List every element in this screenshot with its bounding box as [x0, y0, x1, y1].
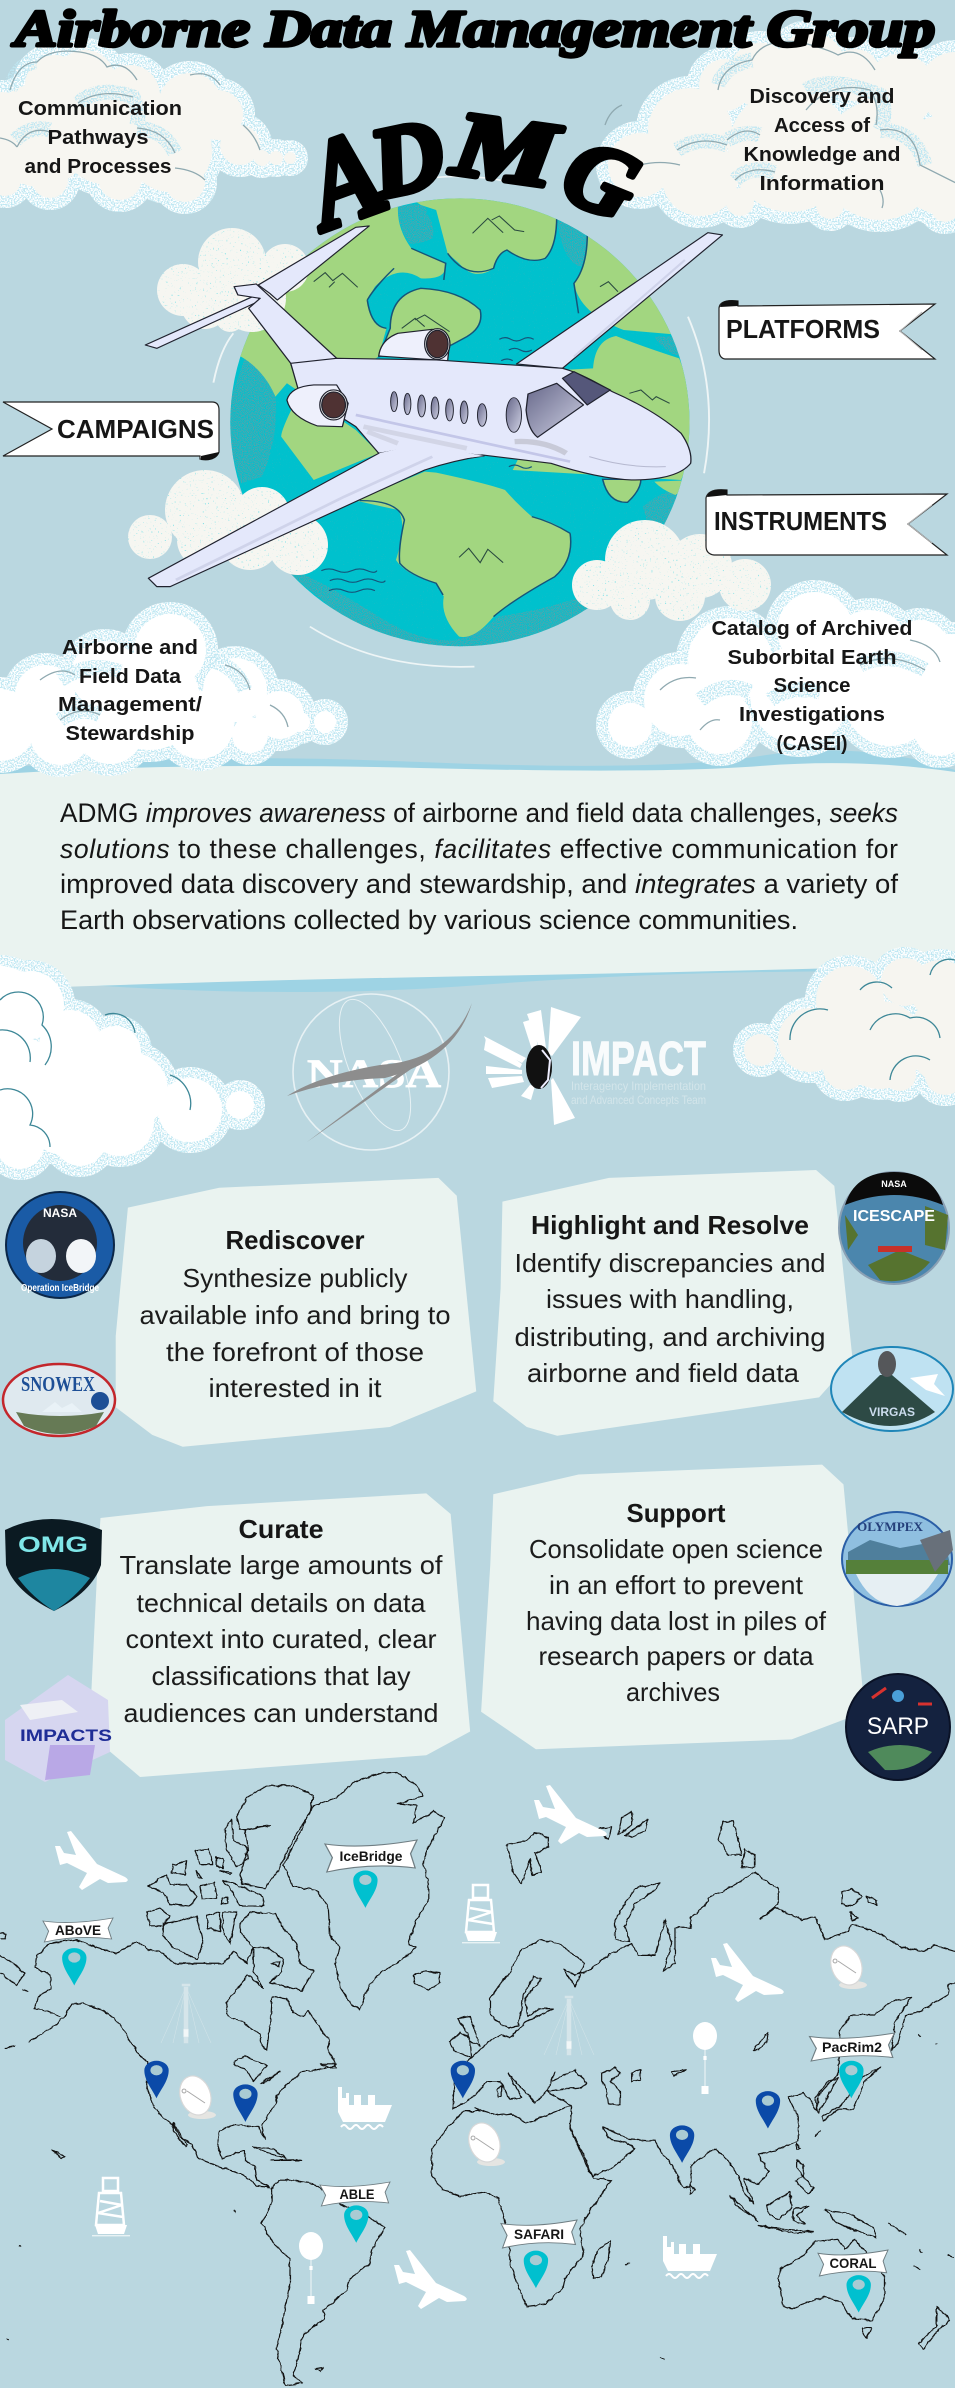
label: CORAL: CORAL: [830, 2255, 877, 2271]
cloud text: Management/: [58, 694, 202, 716]
small clouds: [128, 228, 771, 621]
panel: rediscover: the forefront of those: [166, 1337, 424, 1367]
panel: rediscover: [116, 1178, 476, 1447]
map icon: ships: [338, 2087, 717, 2278]
badge: OMG: [5, 1519, 102, 1611]
logo: NASA: NASA: [307, 1051, 441, 1096]
cloud text: Airborne and: [62, 637, 198, 659]
cloud: CASEI: [608, 592, 955, 756]
ribbon: instruments: [706, 490, 947, 555]
ribbon: platforms: PLATFORMS: [726, 316, 880, 344]
badge: Operation IceBridge: [6, 1192, 114, 1298]
panel: curate: context into curated, clear: [126, 1624, 437, 1654]
cloud text: [18, 98, 182, 178]
map: americas and arctic: [0, 1772, 480, 2385]
logo: ADMG lettering: M: [445, 91, 567, 208]
cloud text: Catalog of Archived: [712, 618, 912, 640]
cloud text: [712, 618, 912, 755]
label: CORAL: [818, 2250, 888, 2276]
world map: [0, 1772, 955, 2385]
badge: SnowEx: [3, 1364, 115, 1436]
logo: ADMG lettering: [281, 91, 653, 259]
label: IceBridge: [325, 1840, 417, 1872]
label: IceBridge: IceBridge: [340, 1848, 403, 1864]
logo: ADMG lettering: A: [281, 102, 402, 259]
panel: curate: technical details on data: [136, 1588, 426, 1618]
label: PacRim2: [810, 2033, 894, 2061]
cloud: discovery: [605, 32, 955, 222]
cloud: stewardship: [0, 614, 336, 765]
badge: IMPACTS: IMPACTS: [20, 1726, 112, 1745]
map icon: satellite dishes: [174, 1942, 867, 2166]
plane: [145, 226, 722, 587]
badge: SARP: [846, 1674, 950, 1780]
ribbon: instruments: INSTRUMENTS: [714, 508, 887, 536]
badge: OLYMPEX: [842, 1512, 953, 1606]
panel: curate: Translate large amounts of: [120, 1550, 443, 1580]
badge: ICESCAPE: ICESCAPE: [853, 1208, 935, 1225]
panel: curate: classifications that lay: [152, 1661, 410, 1691]
cloud: lower left: [0, 966, 254, 1169]
ribbon: campaigns: [3, 402, 219, 460]
logo: IMPACT: Interagency Implementation: [571, 1079, 706, 1093]
cloud text: Knowledge and: [744, 144, 900, 166]
panel: curate: audiences can understand: [124, 1698, 439, 1728]
hero: globe and plane: [128, 176, 771, 667]
panel: rediscover: available info and bring to: [140, 1300, 450, 1330]
badge: VIRGAS: VIRGAS: [869, 1405, 915, 1419]
mission text: solutions to these challenges, facilitates effective communication for: [60, 834, 898, 864]
map icon: balloons: [299, 2022, 717, 2304]
panel: rediscover: interested in it: [208, 1373, 382, 1403]
globe: [230, 198, 690, 646]
cloud text: (CASEI): [776, 733, 848, 755]
panel: rediscover: Rediscover: [226, 1225, 364, 1255]
badge: Operation IceBridge: NASA: [43, 1206, 77, 1220]
logo: ADMG lettering: G: [549, 116, 653, 241]
logo: IMPACT: IMPACT: [571, 1033, 706, 1086]
cloud: communication: [0, 50, 296, 202]
badge: OLYMPEX: OLYMPEX: [857, 1519, 924, 1534]
cloud text: Investigations: [739, 704, 885, 726]
panel: support: Consolidate open science: [529, 1534, 823, 1564]
panel: curate: Curate: [238, 1514, 324, 1544]
badge: ICESCAPE: [839, 1172, 949, 1284]
badge: IMPACTS: [5, 1675, 112, 1782]
badge: SARP: SARP: [867, 1713, 929, 1740]
map icon: airplanes: [55, 1785, 784, 2309]
cloud text: Science: [774, 675, 850, 697]
map: eurasia, africa, oceania: [432, 1811, 955, 2360]
panel: highlight and resolve: airborne and field data: [527, 1358, 800, 1388]
cloud text: [58, 637, 202, 745]
panel: support: archives: [626, 1677, 720, 1707]
label: ABoVE: ABoVE: [55, 1922, 101, 1938]
cloud text: Stewardship: [66, 723, 194, 745]
panel: rediscover: Synthesize publicly: [182, 1263, 408, 1293]
panel: highlight and resolve: issues with handling,: [546, 1284, 794, 1314]
panel: support: research papers or data: [538, 1641, 814, 1671]
campaign pins: teal: [62, 1870, 871, 2313]
ribbon: campaigns: CAMPAIGNS: [57, 416, 214, 444]
logo: NASA: [287, 990, 472, 1150]
mission text: ADMG improves awareness of airborne and field data challenges, seeks: [60, 798, 898, 828]
label: ABLE: ABLE: [340, 2186, 374, 2202]
cloud text: Field Data: [79, 666, 182, 688]
campaign pins: blue: [144, 2061, 780, 2163]
label: ABoVE: [43, 1918, 113, 1942]
panel: mission statement: [0, 750, 955, 992]
badge: VIRGAS: [831, 1347, 953, 1431]
title: Airborne Data Management Group: [11, 1, 935, 58]
cloud text: Information: [760, 173, 884, 195]
mission text: Earth observations collected by various science communities.: [60, 905, 798, 935]
badge: ICESCAPE: NASA: [881, 1179, 907, 1189]
mission text: [60, 798, 899, 935]
panel: support: in an effort to prevent: [549, 1570, 804, 1600]
badge: SnowEx: SNOWEX: [21, 1372, 95, 1396]
cloud text: Discovery and: [750, 86, 894, 108]
panel: support: Support: [626, 1498, 726, 1528]
panel: highlight and resolve: Identify discrepancies and: [514, 1248, 826, 1278]
orbit arcs: [213, 176, 709, 667]
label: SAFARI: [501, 2220, 577, 2248]
map icon: buoys: [92, 1885, 500, 2236]
logo: ADMG lettering: D: [359, 96, 454, 220]
panel: curate: [91, 1493, 470, 1777]
panel: highlight and resolve: distributing, and archiving: [514, 1322, 826, 1352]
cloud text: Pathways: [48, 127, 148, 149]
ribbon: platforms: [719, 300, 935, 359]
cloud text: [744, 86, 900, 195]
badge: Operation IceBridge: Operation IceBridge: [21, 1283, 99, 1294]
cloud text: Communication: [18, 98, 182, 120]
label: PacRim2: PacRim2: [822, 2039, 882, 2055]
logo: IMPACT: [484, 1007, 706, 1125]
panel: support: [481, 1465, 865, 1749]
panel: highlight and resolve: [493, 1170, 853, 1436]
cloud text: and Processes: [24, 156, 172, 178]
cloud text: Access of: [774, 115, 870, 137]
cloud text: Suborbital Earth: [728, 647, 896, 669]
map icon: towers: [161, 1984, 594, 2055]
mission text: improved data discovery and stewardship, and integrates a variety of: [60, 869, 899, 899]
panel: highlight and resolve: Highlight and Resolve: [531, 1210, 809, 1240]
label: ABLE: [320, 2182, 390, 2206]
label: SAFARI: SAFARI: [514, 2226, 564, 2242]
badge: OMG: OMG: [18, 1532, 88, 1557]
panel: support: having data lost in piles of: [526, 1606, 827, 1636]
cloud: lower right: [744, 958, 955, 1095]
logo: IMPACT: and Advanced Concepts Team: [571, 1093, 706, 1107]
